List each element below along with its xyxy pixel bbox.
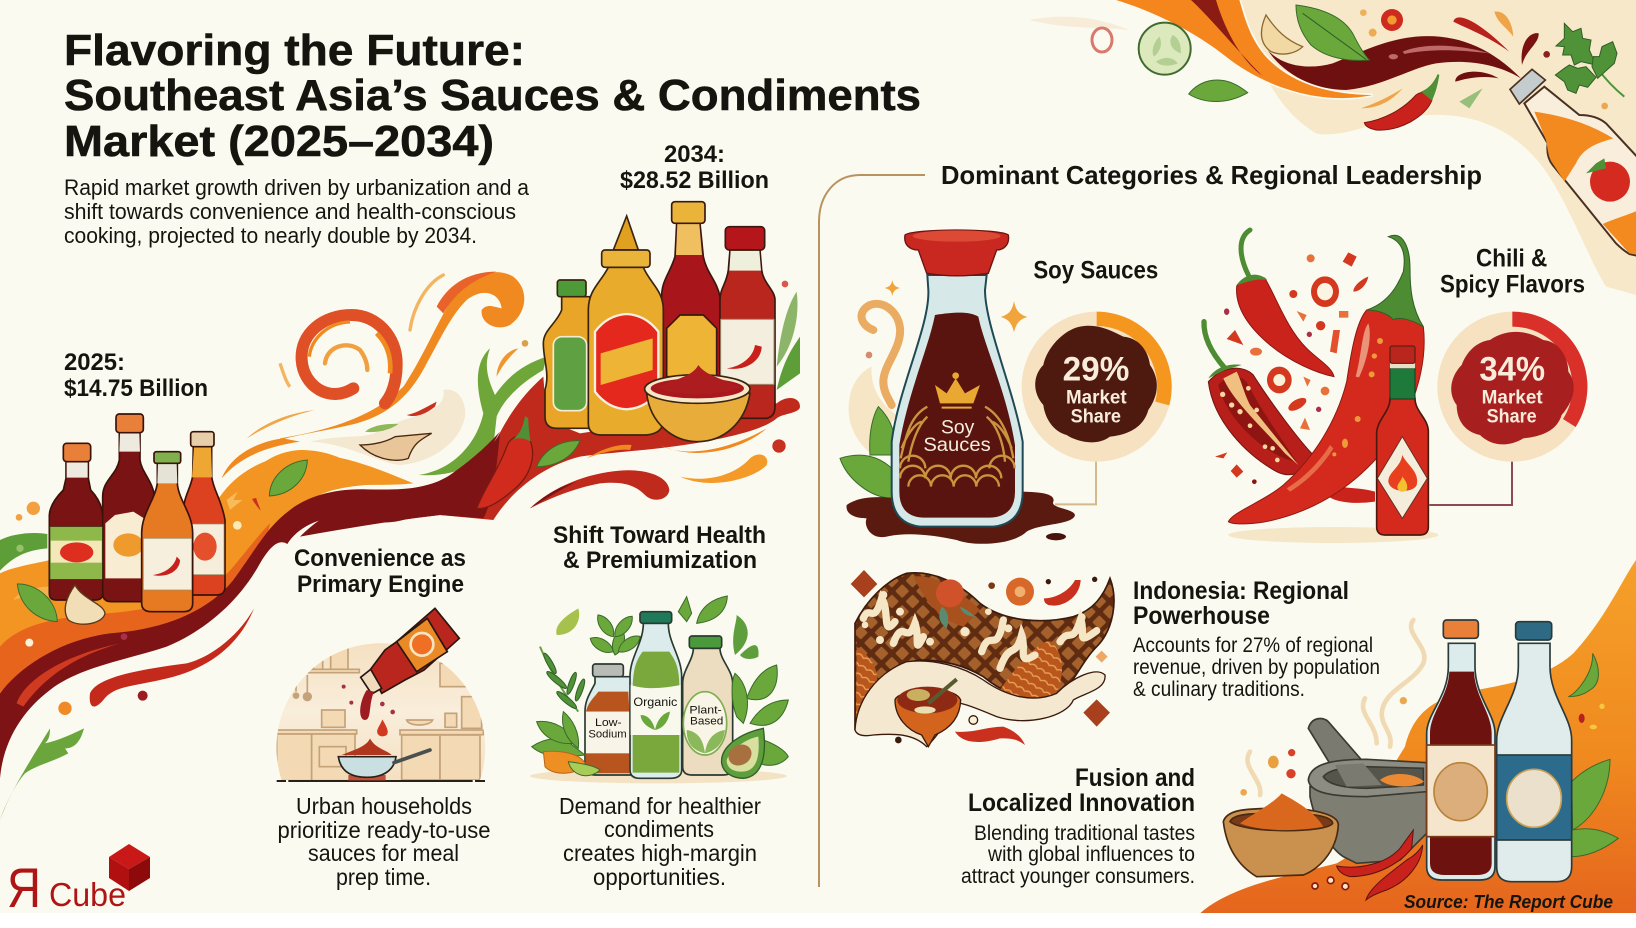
title: Flavoring the Future: [64,26,525,75]
badge: 34 percent: Share [1487,406,1537,427]
main red wave [307,377,800,533]
heading: chili and spicy flavors [1440,245,1585,298]
text: fusion description: with global influences to [987,842,1195,866]
badge: 29 percent: Market [1066,387,1127,408]
orange curl [280,272,524,440]
orange drop [680,455,767,483]
panel: health illustration [530,596,788,783]
text: health description: creates high-margin [563,840,757,866]
subtitle: shift towards convenience and health-conscious [64,199,516,224]
sauce stream [1268,36,1521,90]
bottle 4 [183,432,225,595]
cream scroll [855,661,1105,747]
garlic [65,585,105,624]
sprig [1459,88,1483,108]
basil leaf [1296,5,1369,60]
label text: Plant- [689,704,722,716]
avocado [722,728,764,778]
bottom white strip [0,913,1636,928]
beige backdrop [1239,0,1636,295]
soy bottle [892,230,1023,527]
pestle and mortar [1308,718,1427,863]
maroon sweep [1191,0,1263,76]
diamonds [851,570,1110,727]
text: health description: condiments [604,816,714,842]
orange flicks [222,438,300,478]
heading: chili and spicy flavors: Chili & [1476,245,1547,273]
red drip [90,608,254,707]
chili flakes [1215,252,1368,484]
2025 bottles group and left ribbon decoration [0,414,254,820]
text: convenience description [278,793,490,890]
heading: fusion: Localized Innovation [968,789,1195,817]
leaf [537,441,580,467]
ground shadow [1228,527,1438,543]
badge: 29 percent: 29% [1063,351,1129,389]
pale flick [410,275,443,330]
low sodium bottle [585,664,632,775]
top-right sauce splash illustration [1029,0,1636,295]
red drops [1453,17,1509,52]
herbs left [556,596,759,659]
2034 value label: $28.52 Billion [620,167,769,194]
text: convenience description: prep time. [336,864,431,890]
ribbon highlight [17,643,120,707]
chili [477,437,533,509]
gold wave pattern [900,407,1015,487]
bottle: blue label [1497,622,1572,882]
tomato slice [1381,9,1403,31]
2025 value label: 2025: [64,349,125,376]
bottle: green-cap oil [543,280,590,428]
bottle label text: Sauces [923,435,991,456]
maroon patch under ribbon [300,433,500,537]
batik cloth [855,573,1114,730]
heading: convenience: Primary Engine [297,571,464,598]
heading: health and premiumization: & Premiumization [563,547,757,574]
bottle 2 [103,414,155,602]
chili [1364,93,1432,130]
cream swirl [310,389,465,465]
panel: fusion illustration [1200,560,1636,913]
pouring bottle [1510,69,1636,258]
text: health description: opportunities. [593,864,726,890]
sparkle stars [885,280,1027,332]
red ring swirl [302,315,397,403]
organic bottle [630,612,682,778]
bottle: right red hot sauce [720,227,775,418]
label text: Sodium [588,728,627,740]
lower drip [530,470,669,508]
pan with sauce [338,738,430,780]
green leaves [1572,759,1610,830]
bottle 1 [49,443,103,600]
sauce bowl [645,365,750,442]
connector [1055,462,1096,504]
bottle 3 [142,452,193,612]
cucumber slice [1139,23,1191,75]
green leaf on ribbon [269,460,307,496]
cilantro [1555,23,1624,97]
flowing sauce ribbon: left part [0,410,413,693]
bowl [895,690,961,747]
green leaves behind 2034 bottles [777,292,797,367]
chili bottom [955,727,1025,745]
badge: 34 percent: Market [1482,387,1543,408]
orange band [0,453,413,693]
ground shadow [530,769,787,783]
label text [689,704,723,727]
text: indonesia description: & culinary traditions. [1133,677,1305,701]
text: convenience description: Urban households [296,793,472,819]
cube icon [109,844,150,891]
2025 value label: $14.75 Billion [64,375,208,402]
label text: Organic [633,695,677,709]
cream parang motifs [863,598,1097,668]
bottle label text [923,417,991,456]
2034 value label [620,141,769,194]
kitchen backdrop [276,643,485,780]
chili top [1044,580,1081,606]
text: fusion description: Blending traditional tastes [974,821,1195,845]
title: Market (2025–2034) [64,117,494,166]
upper chili [1236,230,1334,377]
heading: fusion: Fusion and [1075,764,1195,792]
2034 value label: 2034: [664,141,725,168]
source credit: Source: The Report Cube [1404,892,1613,912]
panel: indonesia batik illustration [851,570,1114,747]
pouring sauce [360,690,374,720]
label text: Based [690,715,723,727]
heading: indonesia: Powerhouse [1133,602,1270,630]
flower [1006,578,1034,606]
plant based bottle [683,636,733,775]
heading: health and premiumization: Shift Toward Health [553,522,766,549]
connector [1429,462,1512,505]
tan swirl [862,304,900,405]
puddle accents [587,445,632,458]
chilies [1312,830,1423,900]
badge: 34 percent: 34% [1479,351,1545,389]
green stalk leaf [418,348,547,475]
hot sauce bottle [1377,346,1428,535]
cream flow [1029,17,1129,30]
left green band [0,533,47,571]
section frame line [819,175,925,887]
small leaf [1189,80,1248,101]
orange tail [233,450,413,500]
flowing sauce ribbon: centre swirl and puddle [0,272,800,778]
bottle: red sauce, back [662,202,720,387]
text: indonesia description: revenue, driven by population [1133,655,1380,679]
orange sweep [1116,0,1373,98]
shelf [277,647,483,781]
heading: indonesia [1133,577,1349,630]
heading: soy sauces: Soy Sauces [1033,256,1158,284]
garlic skin [360,433,432,460]
title [64,26,921,166]
heading: convenience: Convenience as [294,545,466,572]
label text: Low- [595,717,622,729]
text: indonesia description [1133,633,1380,701]
bottle: mustard squeeze [588,216,663,435]
bottle: soy [1427,620,1495,880]
rosemary [540,647,578,712]
red wave fleck [407,402,437,416]
onion ring [1092,28,1112,52]
logo: report cube: Cube [49,876,126,913]
2025 value label [64,349,208,402]
badge: 29 percent [1022,312,1172,462]
red fleck [250,493,261,511]
panel: convenience illustration [276,608,485,781]
green sprig [0,728,84,820]
bottle label text: Soy [941,417,975,438]
badge: 29 percent: Share [1071,406,1121,427]
big chili [1228,235,1424,524]
text: health description [559,793,761,890]
heading: fusion [968,764,1195,817]
label text [588,717,627,740]
crown [935,378,980,403]
leaves [870,407,895,455]
heading: health and premiumization [553,522,766,574]
inner swirl arc [325,345,367,370]
section heading: Dominant Categories & Regional Leadership [941,160,1482,190]
leaf [17,584,57,622]
pouring bottle [361,608,459,694]
logo: report cube: Я [7,856,41,919]
heading: indonesia: Indonesia: Regional [1133,577,1349,605]
small orange flame [497,348,518,377]
deeper orange band [0,523,270,693]
orange thin flick [1361,88,1403,108]
halved chili [1204,322,1375,503]
subtitle: cooking, projected to nearly double by 2034. [64,223,477,248]
cloud [342,623,378,634]
panel: chili and spicy flavors [1204,230,1587,543]
heading: chili and spicy flavors: Spicy Flavors [1440,270,1585,298]
heading: convenience [294,545,466,598]
maroon wave [0,432,500,778]
text: convenience description: prioritize ready-to-use [278,817,490,843]
2034 bottles group [543,202,775,442]
text: fusion description: attract younger consumers. [961,864,1195,888]
foreground leaves [532,665,788,776]
orange backdrop [1200,560,1636,913]
text: health description: Demand for healthier [559,793,761,819]
badge: 34 percent [1437,312,1587,462]
title: Southeast Asia’s Sauces & Condiments [64,71,921,120]
subtitle: Rapid market growth driven by urbanization and a [64,175,530,200]
text: fusion description [961,821,1195,888]
rust batik patch [1000,641,1062,701]
panel: soy sauces [840,230,1172,544]
logo: report cube [7,844,150,919]
garlic clove [1261,15,1303,54]
steam [1247,620,1424,795]
subtitle [64,175,530,248]
soy puddle [847,492,1075,544]
spice bowl [1223,793,1338,877]
cream backdrop [849,367,897,455]
counter line [277,778,485,784]
text: convenience description: sauces for meal [308,840,459,866]
text: indonesia description: Accounts for 27% of regional [1133,633,1373,657]
